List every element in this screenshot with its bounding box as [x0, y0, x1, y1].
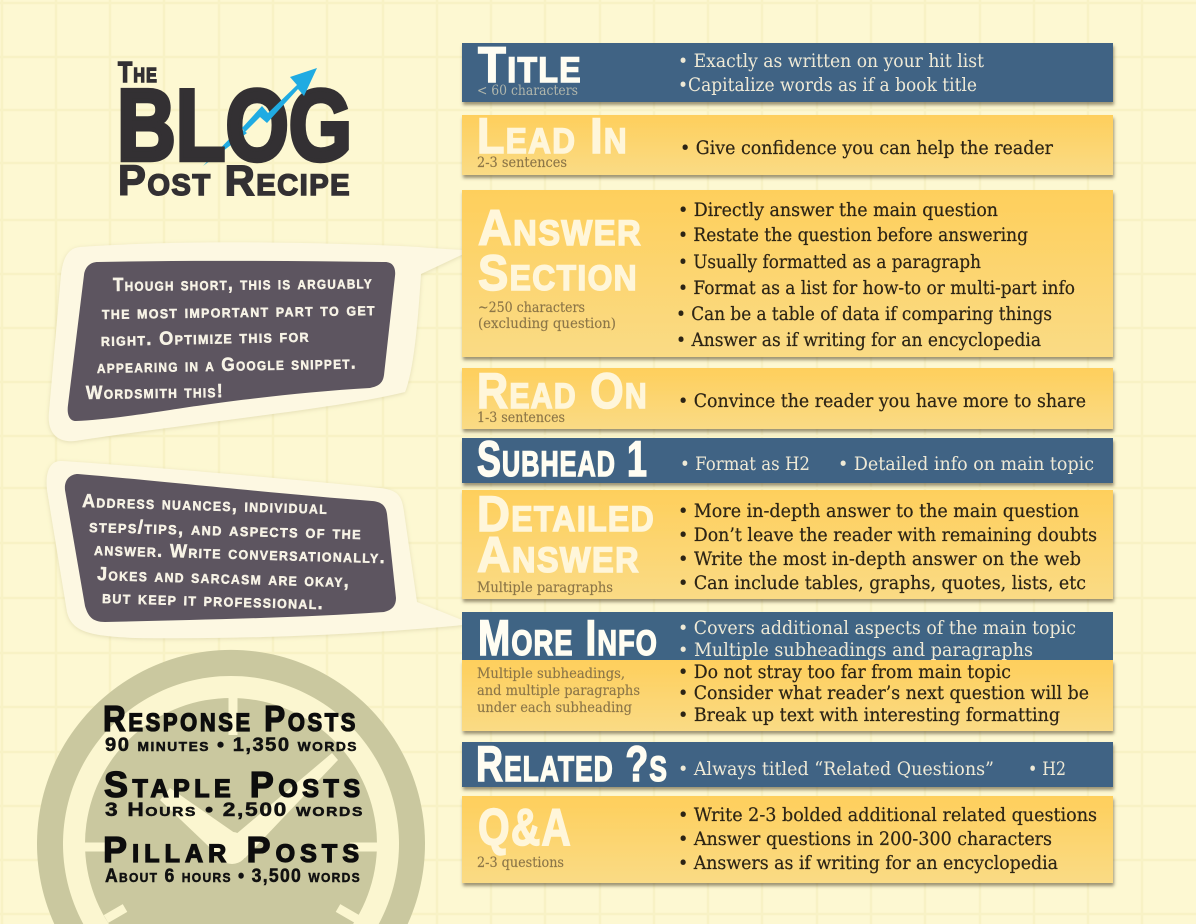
panel: q and a	[462, 796, 1113, 883]
panel: subhead 1	[462, 431, 1113, 487]
callout: answer section: Though short, this is arguably	[113, 272, 373, 296]
panel: answer section: (excluding question)	[478, 316, 616, 332]
callout: detailed answer: steps/tips, and aspects of the	[89, 516, 362, 544]
logo: Post Recipe	[118, 157, 351, 205]
panel: answer section: • Restate the question before answering	[678, 225, 1028, 246]
panel: detailed answer: • Don’t leave the reader with remaining doubts	[678, 525, 1097, 546]
logo: The	[118, 57, 158, 89]
pillar posts: About 6 hours • 3,500 words	[105, 866, 361, 887]
callout: answer section	[49, 242, 472, 441]
panel: q and a: • Answers as if writing for an encyclopedia	[678, 853, 1058, 874]
panel: detailed answer: Detailed	[477, 486, 655, 542]
icon: arrow tail	[203, 128, 247, 166]
logo: BLOG	[117, 70, 352, 182]
panel: more info: • Do not stray too far from main topic	[678, 662, 1011, 683]
panel: read on: Read On	[477, 363, 648, 419]
panel: related questions	[462, 736, 1113, 792]
callout: detailed answer: Jokes and sarcasm are okay,	[97, 564, 350, 592]
panel: title: Title	[478, 37, 582, 93]
panel: answer section: • Answer as if writing for an encyclopedia	[676, 330, 1041, 351]
panel: detailed answer: • Can include tables, graphs, quotes, lists, etc	[678, 573, 1086, 594]
panel: answer section: ~250 characters	[478, 300, 585, 316]
response posts: 90 minutes • 1,350 words	[105, 735, 358, 756]
panel: detailed answer: • Write the most in-depth answer on the web	[678, 549, 1081, 570]
panel: detailed answer: • More in-depth answer to the main question	[678, 501, 1079, 522]
panel: read on: 1-3 sentences	[477, 410, 565, 426]
panel: more info: and multiple paragraphs	[477, 683, 640, 699]
panel: title	[462, 37, 1113, 102]
panel: lead in: 2-3 sentences	[477, 155, 567, 171]
callout: detailed answer: answer. Write conversationally.	[94, 539, 386, 568]
panel: related questions: Related ?s	[476, 736, 668, 792]
panel: detailed answer	[462, 486, 1113, 599]
panel: read on	[462, 363, 1113, 429]
panel: more info: Multiple subheadings,	[477, 666, 625, 682]
panel: title: •Capitalize words as if a book title	[678, 75, 977, 96]
panel: answer section	[462, 190, 1113, 357]
callout: detailed answer: Address nuances, individual	[82, 491, 328, 519]
panel: subhead 1: Subhead 1	[477, 431, 648, 487]
panel: subhead 1: • Detailed info on main topic	[838, 454, 1094, 475]
callout: answer section: the most important part to get	[102, 299, 376, 324]
panel: answer section: • Format as a list for how-to or multi-part info	[678, 278, 1075, 299]
panel: answer section: Answer	[478, 200, 642, 256]
panel: more info	[462, 610, 1113, 731]
logo	[117, 57, 352, 205]
panel: more info: • Break up text with interesting formatting	[678, 705, 1060, 726]
panel: more info: • Consider what reader’s next question will be	[678, 683, 1089, 704]
callout: detailed answer	[47, 461, 472, 638]
panel: more info: • Covers additional aspects of the main topic	[678, 618, 1076, 639]
callout: answer section: Wordsmith this!	[86, 381, 224, 404]
panel: lead in: • Give confidence you can help the reader	[680, 138, 1053, 159]
panel: q and a: • Answer questions in 200-300 characters	[678, 829, 1052, 850]
panel: q and a: 2-3 questions	[477, 855, 564, 871]
panel: detailed answer: Multiple paragraphs	[477, 580, 613, 596]
panel: read on: • Convince the reader you have more to share	[678, 391, 1086, 412]
panel: answer section: • Directly answer the main question	[678, 200, 998, 221]
staple posts: 3 Hours • 2,500 words	[105, 800, 364, 821]
panel: q and a: Q&A	[478, 799, 572, 857]
panel: related questions: • Always titled “Related Questions”	[678, 759, 994, 780]
staple posts: Staple Posts	[104, 764, 363, 805]
pillar posts: Pillar Posts	[103, 829, 362, 870]
panel: more info: • Multiple subheadings and paragraphs	[678, 640, 1033, 661]
callout: answer section: appearing in a Google snippet.	[97, 352, 357, 378]
panel: title: < 60 characters	[477, 83, 578, 99]
panel: q and a: • Write 2-3 bolded additional related questions	[678, 805, 1097, 826]
response posts: Response Posts	[103, 698, 358, 739]
panel: answer section: • Can be a table of data if comparing things	[676, 304, 1052, 325]
post types	[103, 698, 364, 887]
panel: lead in	[462, 108, 1113, 175]
callout: answer section: right. Optimize this for	[101, 326, 310, 351]
panel: more info: More Info	[478, 610, 658, 666]
panel: title: • Exactly as written on your hit list	[678, 51, 985, 72]
panel: detailed answer: Answer	[477, 527, 640, 583]
callout: detailed answer: but keep it professional.	[102, 587, 324, 614]
panel: lead in: Lead In	[477, 108, 628, 164]
clock background	[37, 650, 425, 924]
panel: answer section: Section	[478, 245, 638, 301]
panel: subhead 1: • Format as H2	[680, 454, 810, 475]
panel: related questions: • H2	[1028, 759, 1066, 780]
panel: answer section: • Usually formatted as a paragraph	[678, 252, 981, 273]
icon: rising arrow	[242, 68, 317, 132]
panel: more info: under each subheading	[477, 700, 632, 716]
response posts	[103, 698, 358, 756]
